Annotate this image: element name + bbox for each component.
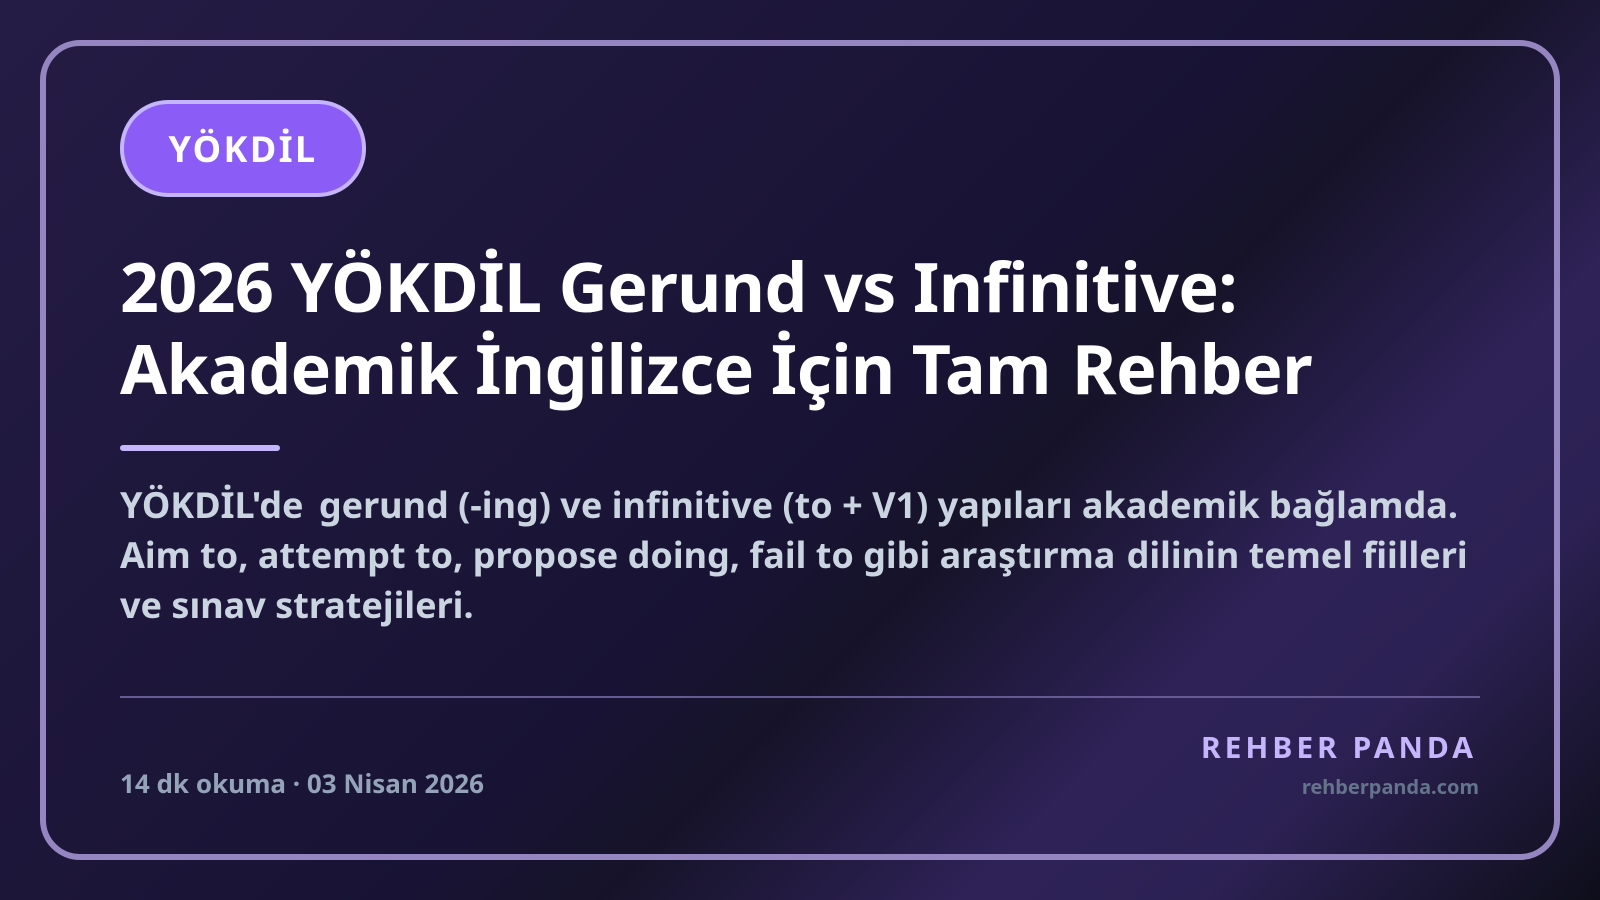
- accent rule: [120, 445, 280, 451]
- title: Akademik İngilizce İçin Tam Rehber: [120, 321, 1312, 414]
- website: rehberpanda.com: [1302, 773, 1479, 800]
- badge: YÖKDİL: YÖKDİL: [168, 124, 318, 173]
- footer divider: [120, 696, 1480, 698]
- reading time and date: 14 dk okuma · 03 Nisan 2026: [120, 765, 484, 801]
- description text: Aim to, attempt to, propose doing, fail to gibi araştırma dilinin temel fiilleri: [120, 530, 1468, 579]
- title: [120, 239, 1312, 414]
- badge: YÖKDİL: [120, 100, 366, 197]
- title: 2026 YÖKDİL Gerund vs Infinitive:: [120, 239, 1237, 332]
- description text: [120, 480, 1468, 629]
- brand name: REHBER PANDA: [1201, 726, 1477, 767]
- description text: YÖKDİL'de gerund (-ing) ve infinitive (to + V1) yapıları akademik bağlamda.: [120, 480, 1458, 529]
- description text: ve sınav stratejileri.: [120, 580, 474, 629]
